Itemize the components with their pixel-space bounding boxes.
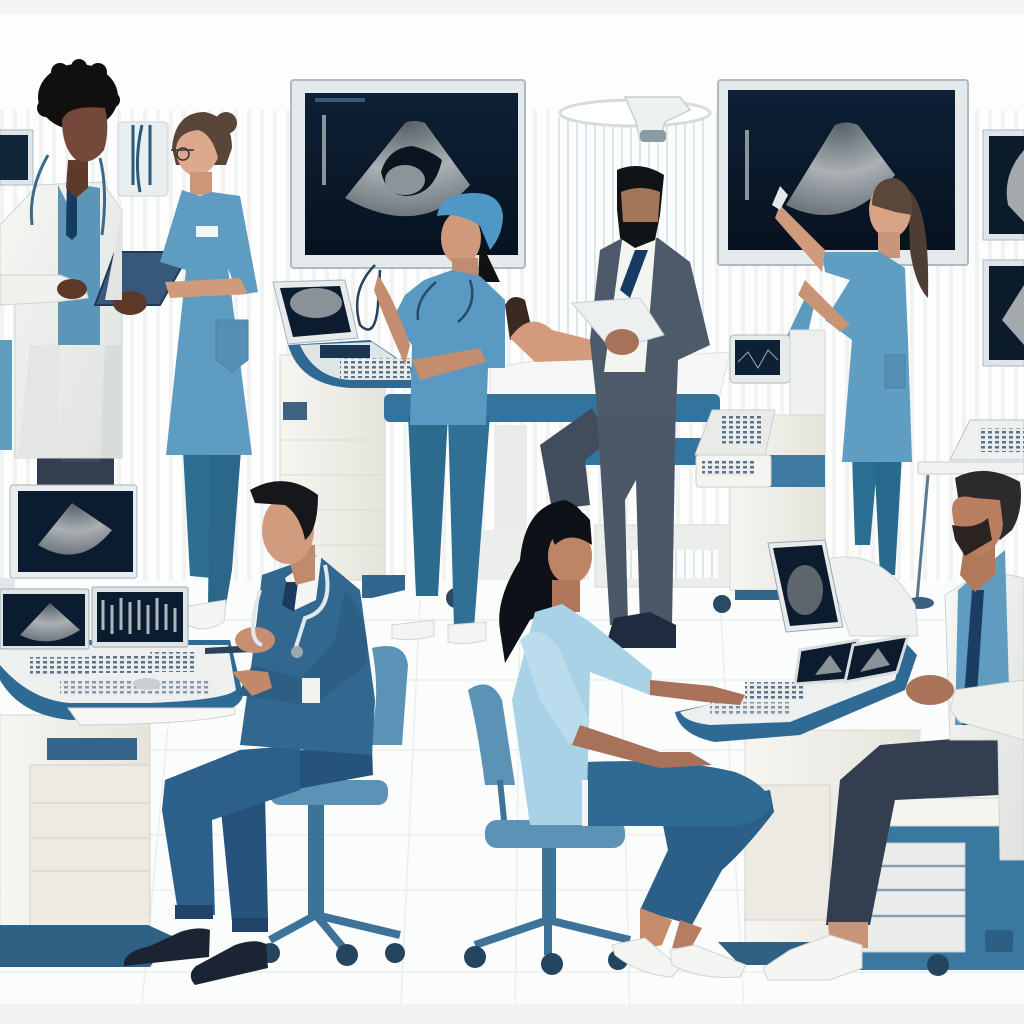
person: doctor in white coat [0, 59, 190, 485]
person: sonographer in cap [374, 193, 505, 644]
person: man in grey suit [540, 166, 710, 648]
person: seated woman at console [499, 500, 774, 978]
monitor: large centre ultrasound [291, 80, 525, 268]
machine: rear right ultrasound cart [695, 298, 825, 613]
monitor: large right ultrasound [718, 80, 968, 265]
machine: foreground right console with monitor [675, 540, 920, 965]
machine: foreground left ultrasound console [0, 485, 243, 967]
person: seated sonographer in navy sweater [124, 481, 375, 985]
chair: foreground centre [464, 684, 630, 975]
cabinet: foreground right drawers [860, 798, 1024, 976]
monitors: wall screens at the edges [0, 122, 1024, 366]
person: nurse with tablet [160, 112, 258, 629]
chair: foreground left [260, 646, 408, 966]
person: seated doctor on right [763, 471, 1024, 980]
machine: far right keyboard stand [906, 420, 1024, 609]
person: nurse pointing at monitor [772, 178, 928, 575]
bed with patient [384, 297, 730, 608]
ceiling lamp and curtain [558, 97, 710, 348]
machine: centre-left ultrasound cart [273, 265, 412, 598]
